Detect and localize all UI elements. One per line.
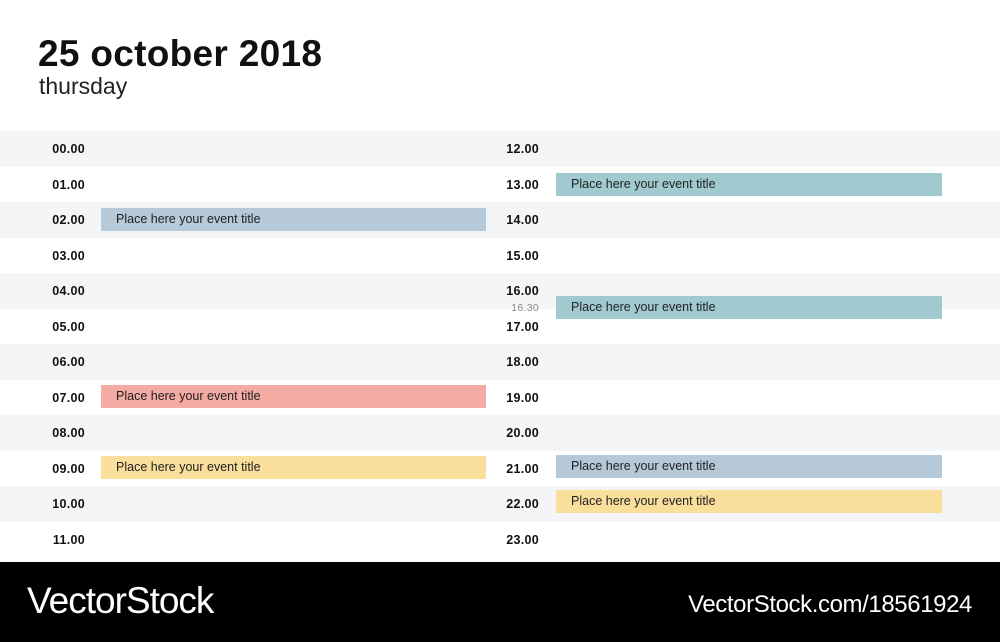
right time labels: 21.00 [506, 462, 539, 476]
footer bar [0, 562, 1000, 642]
event: 16.30: Place here your event title [571, 300, 716, 314]
left time labels: 11.00 [53, 533, 85, 547]
schedule grid [0, 131, 1000, 547]
event: 16.30 [556, 296, 942, 319]
left time labels: 00.00 [52, 142, 85, 156]
right time labels: 23.00 [506, 533, 539, 547]
footer url: VectorStock.com/18561924 [688, 591, 972, 618]
left time labels: 10.00 [52, 497, 85, 511]
right time labels: 13.00 [506, 178, 539, 192]
event: 07.00 [101, 385, 486, 408]
right time labels: 12.00 [506, 142, 539, 156]
left time labels: 04.00 [52, 284, 85, 298]
event: 21.00 [556, 455, 942, 478]
left time labels: 09.00 [52, 462, 85, 476]
right time labels: 20.00 [506, 426, 539, 440]
title: 25 october 2018 [38, 33, 322, 74]
right time labels: 17.00 [506, 320, 539, 334]
right time labels: 19.00 [506, 391, 539, 405]
right time labels: 14.00 [506, 213, 539, 227]
left time labels: 03.00 [52, 249, 85, 263]
footer logo: VectorStock [27, 580, 213, 621]
event: 13.00 [556, 173, 942, 196]
subtitle: thursday [39, 73, 127, 99]
event: 21.00: Place here your event title [571, 459, 716, 473]
left time labels: 06.00 [52, 355, 85, 369]
left time labels: 05.00 [52, 320, 85, 334]
right time labels [506, 142, 539, 547]
event: 07.00: Place here your event title [116, 389, 261, 403]
event: 09.00: Place here your event title [116, 460, 261, 474]
right time labels: 16.00 [506, 284, 539, 298]
right time labels: 22.00 [506, 497, 539, 511]
event: 02.00 [101, 208, 486, 231]
event: 22.00: Place here your event title [571, 494, 716, 508]
event: 02.00: Place here your event title [116, 212, 261, 226]
left time labels [52, 142, 85, 547]
left time labels: 07.00 [52, 391, 85, 405]
right time labels: 18.00 [506, 355, 539, 369]
right time labels: 16.30 [511, 302, 539, 314]
left time labels: 08.00 [52, 426, 85, 440]
left time labels: 01.00 [52, 178, 85, 192]
event: 13.00: Place here your event title [571, 177, 716, 191]
event: 09.00 [101, 456, 486, 479]
right time labels: 15.00 [506, 249, 539, 263]
event: 22.00 [556, 490, 942, 513]
left time labels: 02.00 [52, 213, 85, 227]
